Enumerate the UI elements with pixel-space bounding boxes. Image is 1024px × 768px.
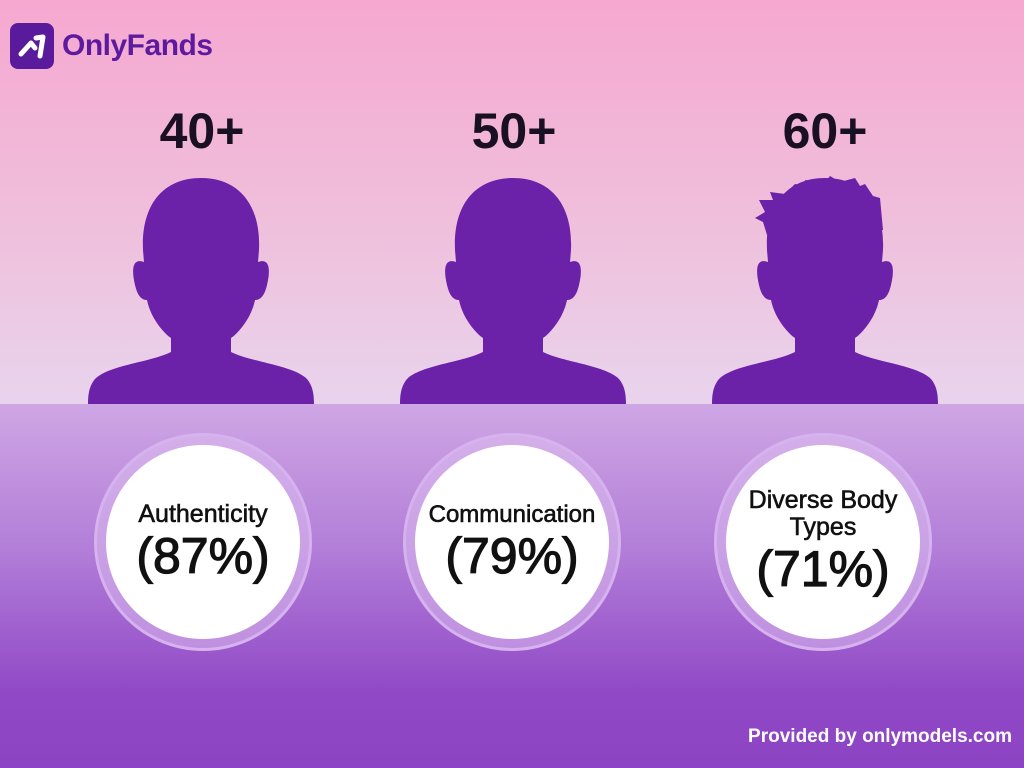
bottom panel xyxy=(0,404,1024,768)
logo text: OnlyFands xyxy=(62,29,213,62)
logo xyxy=(10,23,213,69)
icon: logo square xyxy=(10,23,54,69)
circle: diverse body types: (71%) xyxy=(756,541,890,597)
text: 50+ xyxy=(472,103,556,159)
circle: communication: (79%) xyxy=(445,528,579,584)
circle: authenticity xyxy=(94,433,312,651)
silhouette 50+ xyxy=(400,178,626,404)
circle: communication: Communication xyxy=(429,500,595,528)
silhouette 60+ xyxy=(712,176,938,404)
footer credit: Provided by onlymodels.com xyxy=(748,726,1012,747)
age labels: 40+ xyxy=(160,103,244,159)
silhouettes xyxy=(88,176,938,404)
circle: authenticity: Authenticity xyxy=(138,500,268,528)
silhouette 40+ xyxy=(88,178,314,404)
circle: diverse body types: Diverse Body xyxy=(749,486,897,514)
circle: authenticity: (87%) xyxy=(136,528,270,584)
circle: diverse body types: Types xyxy=(790,513,856,541)
text: 60+ xyxy=(783,103,867,159)
circle: diverse body types xyxy=(714,433,932,651)
circle: communication xyxy=(403,433,621,651)
